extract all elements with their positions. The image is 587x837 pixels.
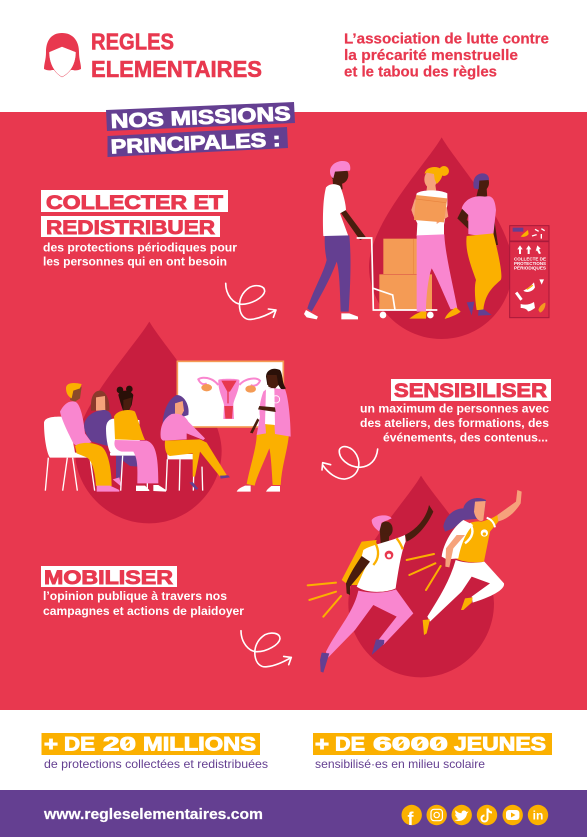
logo wordmark: ELEMENTAIRES [91,56,262,82]
stat: 20 millions: 20 [103,734,136,756]
stat: 20 millions [42,733,268,771]
panel: collecter [41,137,549,339]
heading: nos missions principales: PRINCIPALES : [110,129,281,158]
tagline [344,30,549,80]
drop shape [348,476,494,677]
heading: nos missions principales [106,102,295,158]
stat: 20 millions: + [44,734,58,756]
stat: 6000 jeunes: 6000 [373,734,448,756]
tagline: L’association de lutte contre [344,30,549,48]
text: sensibiliser description: événements, des contenus... [383,430,548,444]
panel: header [44,28,549,82]
collection poster: PROTECTIONS [514,261,546,266]
collection poster: COLLECTE DE [514,257,546,262]
panel: mobiliser [41,476,522,677]
heading: nos missions principales: NOS MISSIONS [110,103,291,133]
illustration: workshop audience and speaker [44,322,291,523]
text: collecter description: des protections périodiques pour [43,240,237,254]
heading: mobiliser: MOBILISER [44,567,173,589]
panel: statistics [42,733,552,771]
tagline: la précarité menstruelle [344,47,518,64]
drop shape [75,322,222,523]
text: mobiliser description: l’opinion publique à travers nos [43,589,227,603]
icon: logo face [44,33,81,77]
icon: tiktok [477,805,497,825]
figure: man pushing cart [304,161,366,319]
text: mobiliser description: campagnes et actions de plaidoyer [43,604,244,618]
icon: twitter [452,805,472,825]
stat: 6000 jeunes: sensibilisé·es en milieu scolaire [315,757,485,771]
motion lines [308,554,441,617]
stat: 6000 jeunes [313,733,552,771]
illustration: volunteers with boxes [304,137,549,339]
icon: instagram [426,805,447,825]
website url: www.regleselementaires.com [43,806,263,823]
heading: collecter et redistribuer: COLLECTER ET [46,192,223,214]
tagline: et le tabou des règles [344,64,497,80]
collection poster [510,226,549,318]
logo wordmark [91,28,262,82]
text: sensibiliser description: des ateliers, des formations, des [360,416,549,430]
figure: seated person in purple [84,391,140,487]
stat: 6000 jeunes: + [315,734,329,756]
stat: 20 millions: de protections collectées et redistribuées [44,757,268,771]
heading: collecter et redistribuer [41,190,228,239]
text: collecter description [43,240,237,268]
panel: sensibiliser [44,322,551,523]
cart with boxes [357,238,437,318]
figure: man leaping [320,505,433,673]
figure: woman standing [457,173,501,316]
figure: woman carrying box [409,166,461,319]
figure: woman leaping [423,490,522,635]
stat: 6000 jeunes: JEUNES [454,734,546,756]
stat: 6000 jeunes: DE [335,734,365,756]
text: collecter description: les personnes qui en ont besoin [43,254,227,268]
text: sensibiliser description: un maximum de personnes avec [360,402,549,416]
figure: seated person left with chair [44,383,119,492]
text: mobiliser description [43,589,244,618]
logo wordmark: REGLES [91,28,174,54]
figure: seated woman with purple hair [161,395,230,491]
presentation board with uterus diagram [177,361,283,427]
text: sensibiliser description [360,402,549,444]
icon: youtube [502,805,523,825]
figure: seated person in yellow [106,386,166,492]
stat: 20 millions: DE [64,734,95,756]
icon: linkedin: in [533,808,543,822]
arrow: squiggle right [241,631,291,667]
arrow: squiggle left [322,447,378,479]
heading: sensibiliser: SENSIBILISER [394,380,547,402]
figure: presenter [237,369,291,492]
icon: linkedin [528,805,548,825]
icon: facebook: f [408,809,414,829]
heading: collecter et redistribuer: REDISTRIBUER [46,217,215,239]
collection poster: PÉRIODIQUES [514,265,546,270]
stat: 20 millions: MILLIONS [143,734,256,756]
arrow: squiggle right [226,283,276,319]
icon: facebook [402,805,422,829]
illustration: two people leaping [308,476,522,677]
panel: footer [0,790,587,837]
drop shape [369,137,513,339]
